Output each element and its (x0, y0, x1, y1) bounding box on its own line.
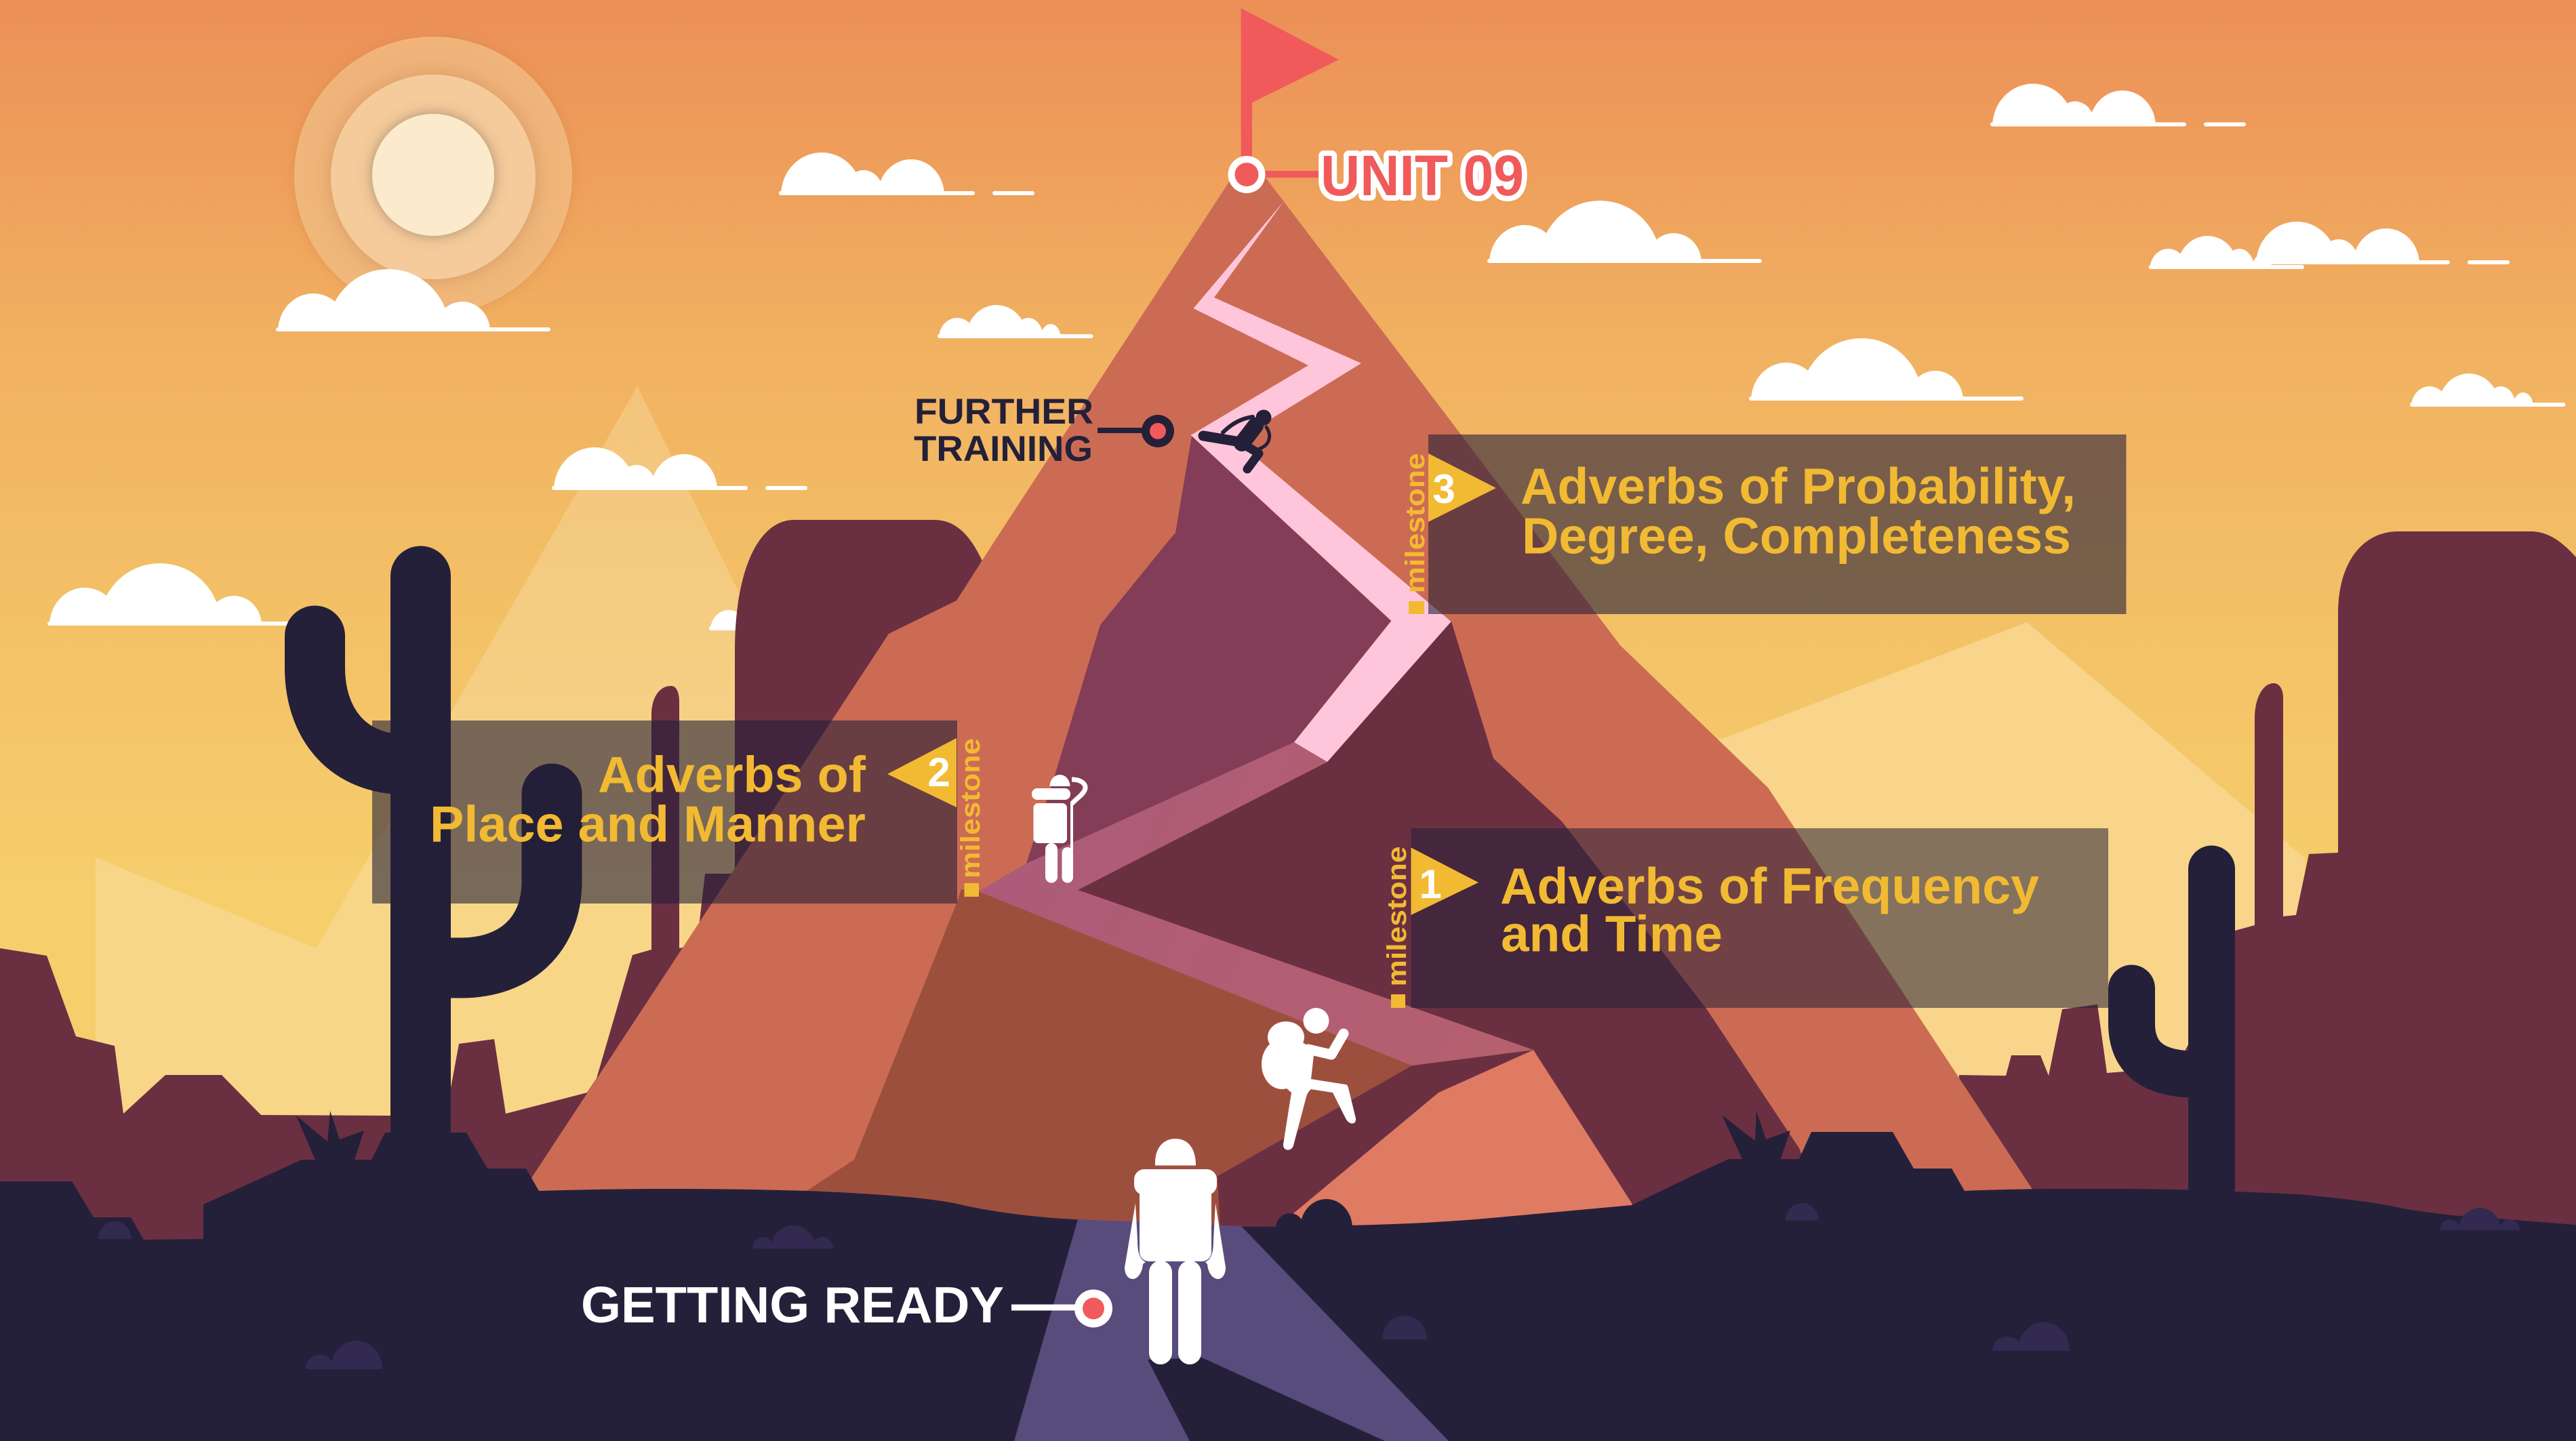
heading: adverbs of probability, degree, completeness: Degree, Completeness (1522, 507, 2071, 564)
milestone label 2: milestone (956, 738, 986, 878)
left rock formation (0, 520, 997, 1288)
pointer 2 (887, 738, 957, 807)
mountain lit face (1293, 1050, 1641, 1240)
cloud right of summit (1487, 201, 1762, 263)
figure: standing climber (1032, 775, 1085, 882)
panel: milestone 2 (372, 720, 986, 904)
cloud upper right front (2254, 222, 2510, 264)
mountain shadow: brown face (780, 889, 1412, 1230)
label: further training (914, 392, 1093, 469)
summit flag (1241, 8, 1339, 163)
right rock formation (1952, 531, 2576, 1240)
cloud near sun (276, 269, 550, 331)
road (1014, 1219, 1449, 1441)
title: unit 09: UNIT 09 (1321, 144, 1524, 207)
marker: getting ready (1011, 1289, 1112, 1327)
cloud far left (47, 563, 322, 626)
heading: adverbs of place and manner (430, 746, 866, 853)
cloud upper right back (2149, 236, 2304, 269)
summit marker (1228, 156, 1329, 193)
label: further training: FURTHER (914, 392, 1093, 432)
trail lower section (978, 742, 1533, 1065)
figure: kicking climber (1203, 409, 1272, 469)
mountain shadow: right face (1078, 622, 1830, 1230)
cloud far right (2410, 373, 2565, 407)
dark bush at mountain foot (1276, 1199, 1352, 1228)
main mountain (529, 166, 2047, 1240)
background peak right (1661, 622, 2305, 1152)
pointer 1: 1 (1419, 861, 1442, 907)
ground (0, 1132, 2576, 1441)
panel: milestone 1 (1382, 828, 2108, 1008)
cloud top centre left (779, 153, 1034, 195)
heading: adverbs of frequency and time: and Time (1501, 906, 1723, 962)
cloud on left peak (552, 447, 807, 490)
trail upper section (1191, 202, 1451, 762)
heading: adverbs of frequency and time: Adverbs of Frequency (1500, 857, 2039, 914)
figure: climbing hiker (1262, 1008, 1356, 1150)
saguaro cactus left (315, 576, 552, 1152)
pointer 3 (1428, 453, 1496, 522)
pointer 3: 3 (1432, 466, 1455, 512)
heading: adverbs of probability, degree, completeness (1521, 458, 2076, 564)
label: getting ready: GETTING READY (581, 1276, 1004, 1333)
pointer 1 (1411, 847, 1478, 915)
milestone label 3: milestone (1401, 453, 1430, 594)
cloud top right (1990, 84, 2246, 126)
mountain shadow: purple face (1026, 436, 1391, 890)
agave plant right (1722, 1111, 1790, 1160)
agave plant left (296, 1111, 364, 1162)
figure: front hiker (1125, 1139, 1226, 1364)
heading: adverbs of place and manner: Place and Manner (430, 796, 866, 853)
panel: milestone 3 (1401, 434, 2126, 614)
pointer 2: 2 (927, 750, 950, 795)
cloud below top centre left (938, 305, 1093, 338)
cloud mid right (1749, 338, 2024, 401)
bushes foreground (98, 1203, 2520, 1369)
heading: adverbs of frequency and time (1500, 857, 2039, 962)
sun (294, 37, 572, 314)
heading: adverbs of place and manner: Adverbs of (598, 746, 866, 803)
milestone label 1: milestone (1382, 846, 1412, 987)
cloud hidden behind rock (709, 597, 865, 630)
saguaro cactus right (2131, 869, 2211, 1186)
label: further training: TRAINING (914, 429, 1093, 469)
heading: adverbs of probability, degree, completeness: Adverbs of Probability, (1521, 458, 2076, 514)
background peak left (96, 386, 881, 1152)
marker: further training (1098, 415, 1174, 447)
